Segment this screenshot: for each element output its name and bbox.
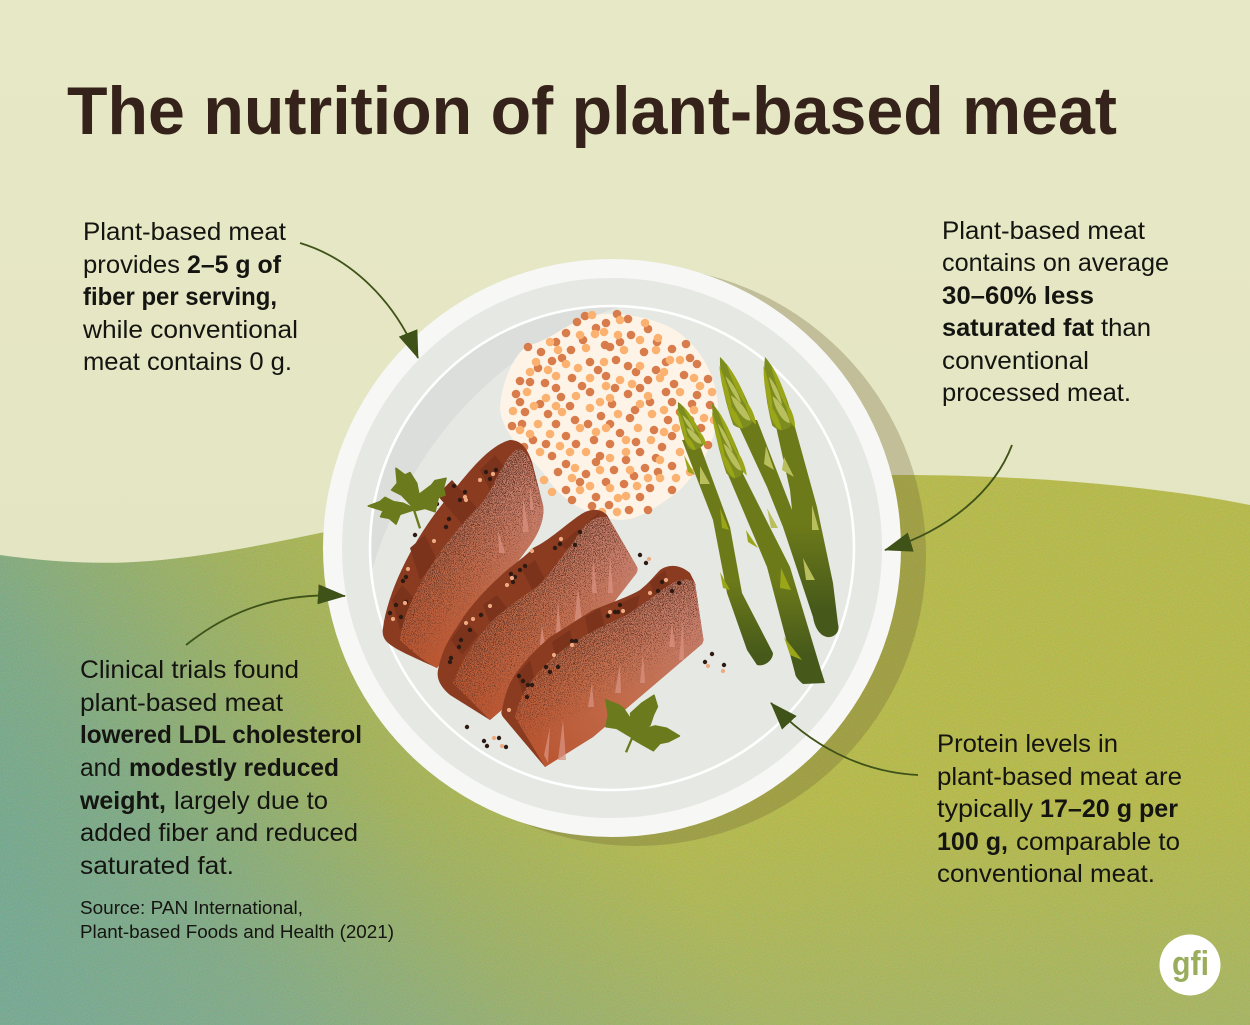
- asparagus spear centre: [703, 400, 825, 684]
- plate: [323, 259, 901, 837]
- meat slice 1: [383, 440, 543, 668]
- asparagus spears right pair: [710, 353, 839, 637]
- logo: gfi: gfi: [1172, 945, 1209, 983]
- source note: Plant-based Foods and Health (2021): [80, 922, 394, 942]
- parsley sprig bottom: [606, 695, 679, 752]
- text block: fiber: fiber per serving,: [83, 283, 277, 311]
- arrow: clinical trials callout: [186, 595, 345, 645]
- text block: fiber: Plant-based meat: [83, 218, 286, 246]
- text block: clinical trials: Clinical trials found: [80, 656, 299, 684]
- arrow: protein callout: [771, 703, 918, 775]
- text block: clinical trials: modestly reduced: [129, 754, 339, 782]
- parsley sprig top-left: [368, 468, 446, 528]
- text block: protein: 17–20 g per: [1040, 795, 1178, 823]
- seeds scattered on plate: [467, 555, 724, 747]
- text block: protein: plant-based meat are: [937, 763, 1182, 791]
- source note: Source: PAN International,: [80, 898, 303, 918]
- text block: saturated fat: conventional: [942, 347, 1089, 375]
- text block: clinical trials: and: [80, 754, 121, 782]
- source note: [80, 898, 394, 942]
- background: green hill: [0, 475, 1250, 1025]
- text block: protein: Protein levels in: [937, 730, 1118, 758]
- text block: fiber: provides: [83, 251, 180, 279]
- text block: saturated fat: processed meat.: [942, 379, 1131, 407]
- asparagus spear left: [670, 398, 773, 665]
- text block: clinical trials: added fiber and reduced: [80, 819, 358, 847]
- text block: saturated fat: [942, 217, 1169, 407]
- text block: fiber: 2–5 g of: [187, 251, 282, 279]
- text block: saturated fat: than: [1101, 314, 1151, 342]
- text block: protein: [937, 730, 1182, 888]
- arrow: saturated fat callout: [885, 445, 1012, 550]
- text block: clinical trials: [79, 656, 362, 880]
- text block: clinical trials: plant-based meat: [80, 689, 283, 717]
- arrow: fiber callout: [300, 243, 418, 358]
- text block: clinical trials: largely due to: [174, 787, 328, 815]
- text block: protein: comparable to: [1016, 828, 1180, 856]
- text block: protein: typically: [937, 795, 1034, 823]
- text block: fiber: while conventional: [82, 316, 298, 344]
- text block: clinical trials: lowered LDL cholesterol: [80, 721, 362, 749]
- text block: protein: conventional meat.: [937, 860, 1155, 888]
- text block: fiber: [82, 218, 298, 376]
- text block: fiber: meat contains 0 g.: [83, 348, 292, 376]
- text block: saturated fat: contains on average: [942, 249, 1169, 277]
- text block: saturated fat: 30–60% less: [942, 282, 1094, 310]
- text block: clinical trials: saturated fat.: [80, 852, 234, 880]
- meat slice 2: [438, 510, 637, 720]
- text block: clinical trials: weight,: [79, 787, 166, 815]
- text block: protein: 100 g,: [937, 828, 1008, 856]
- logo: gfi: [1160, 934, 1220, 996]
- lentils: [500, 314, 718, 520]
- meat slice 3: [501, 566, 703, 767]
- text block: saturated fat: Plant-based meat: [942, 217, 1145, 245]
- plate shadow: [346, 266, 926, 846]
- title: The nutrition of plant-based meat: [67, 73, 1117, 149]
- text block: saturated fat: saturated fat: [942, 314, 1095, 342]
